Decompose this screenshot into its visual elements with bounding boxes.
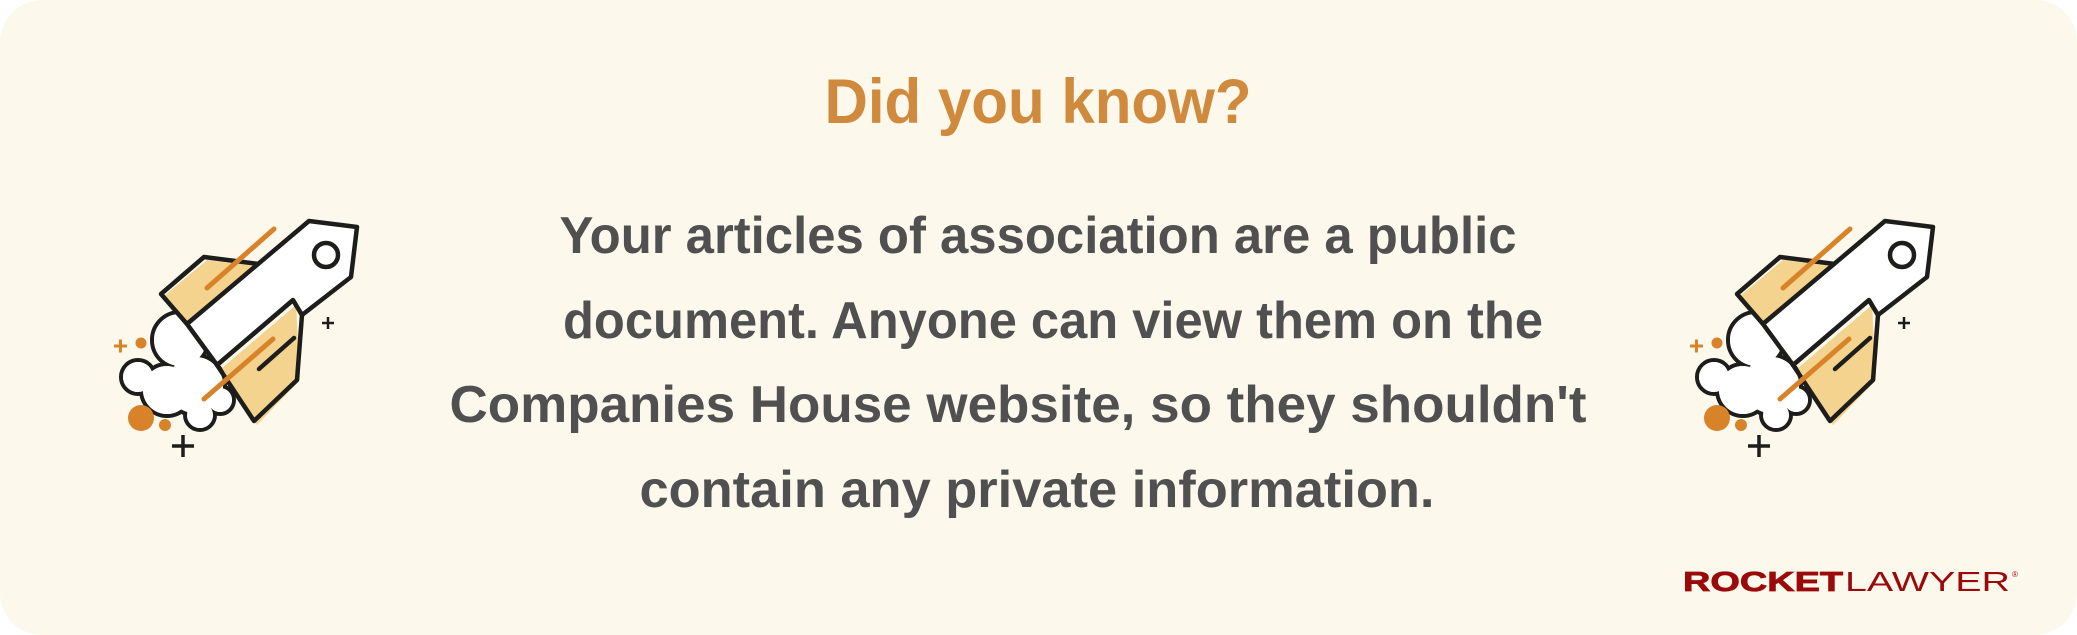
logo: Rocket Lawyer — [1683, 566, 2018, 597]
icon: rocket left — [114, 221, 357, 457]
logo: Rocket Lawyer: ROCKET — [1683, 566, 1843, 597]
body text: contain any private information. — [640, 461, 1434, 519]
icon: rocket right — [1690, 221, 1933, 457]
body text: Your articles of association are a public — [560, 207, 1516, 265]
logo: Rocket Lawyer: ® — [2012, 570, 2018, 579]
body text — [450, 207, 1586, 519]
title: Did you know? — [824, 67, 1252, 137]
body text: Companies House website, so they shouldn't — [450, 376, 1586, 434]
body text: document. Anyone can view them on the — [563, 292, 1543, 350]
logo: Rocket Lawyer: LAWYER — [1845, 566, 2010, 597]
